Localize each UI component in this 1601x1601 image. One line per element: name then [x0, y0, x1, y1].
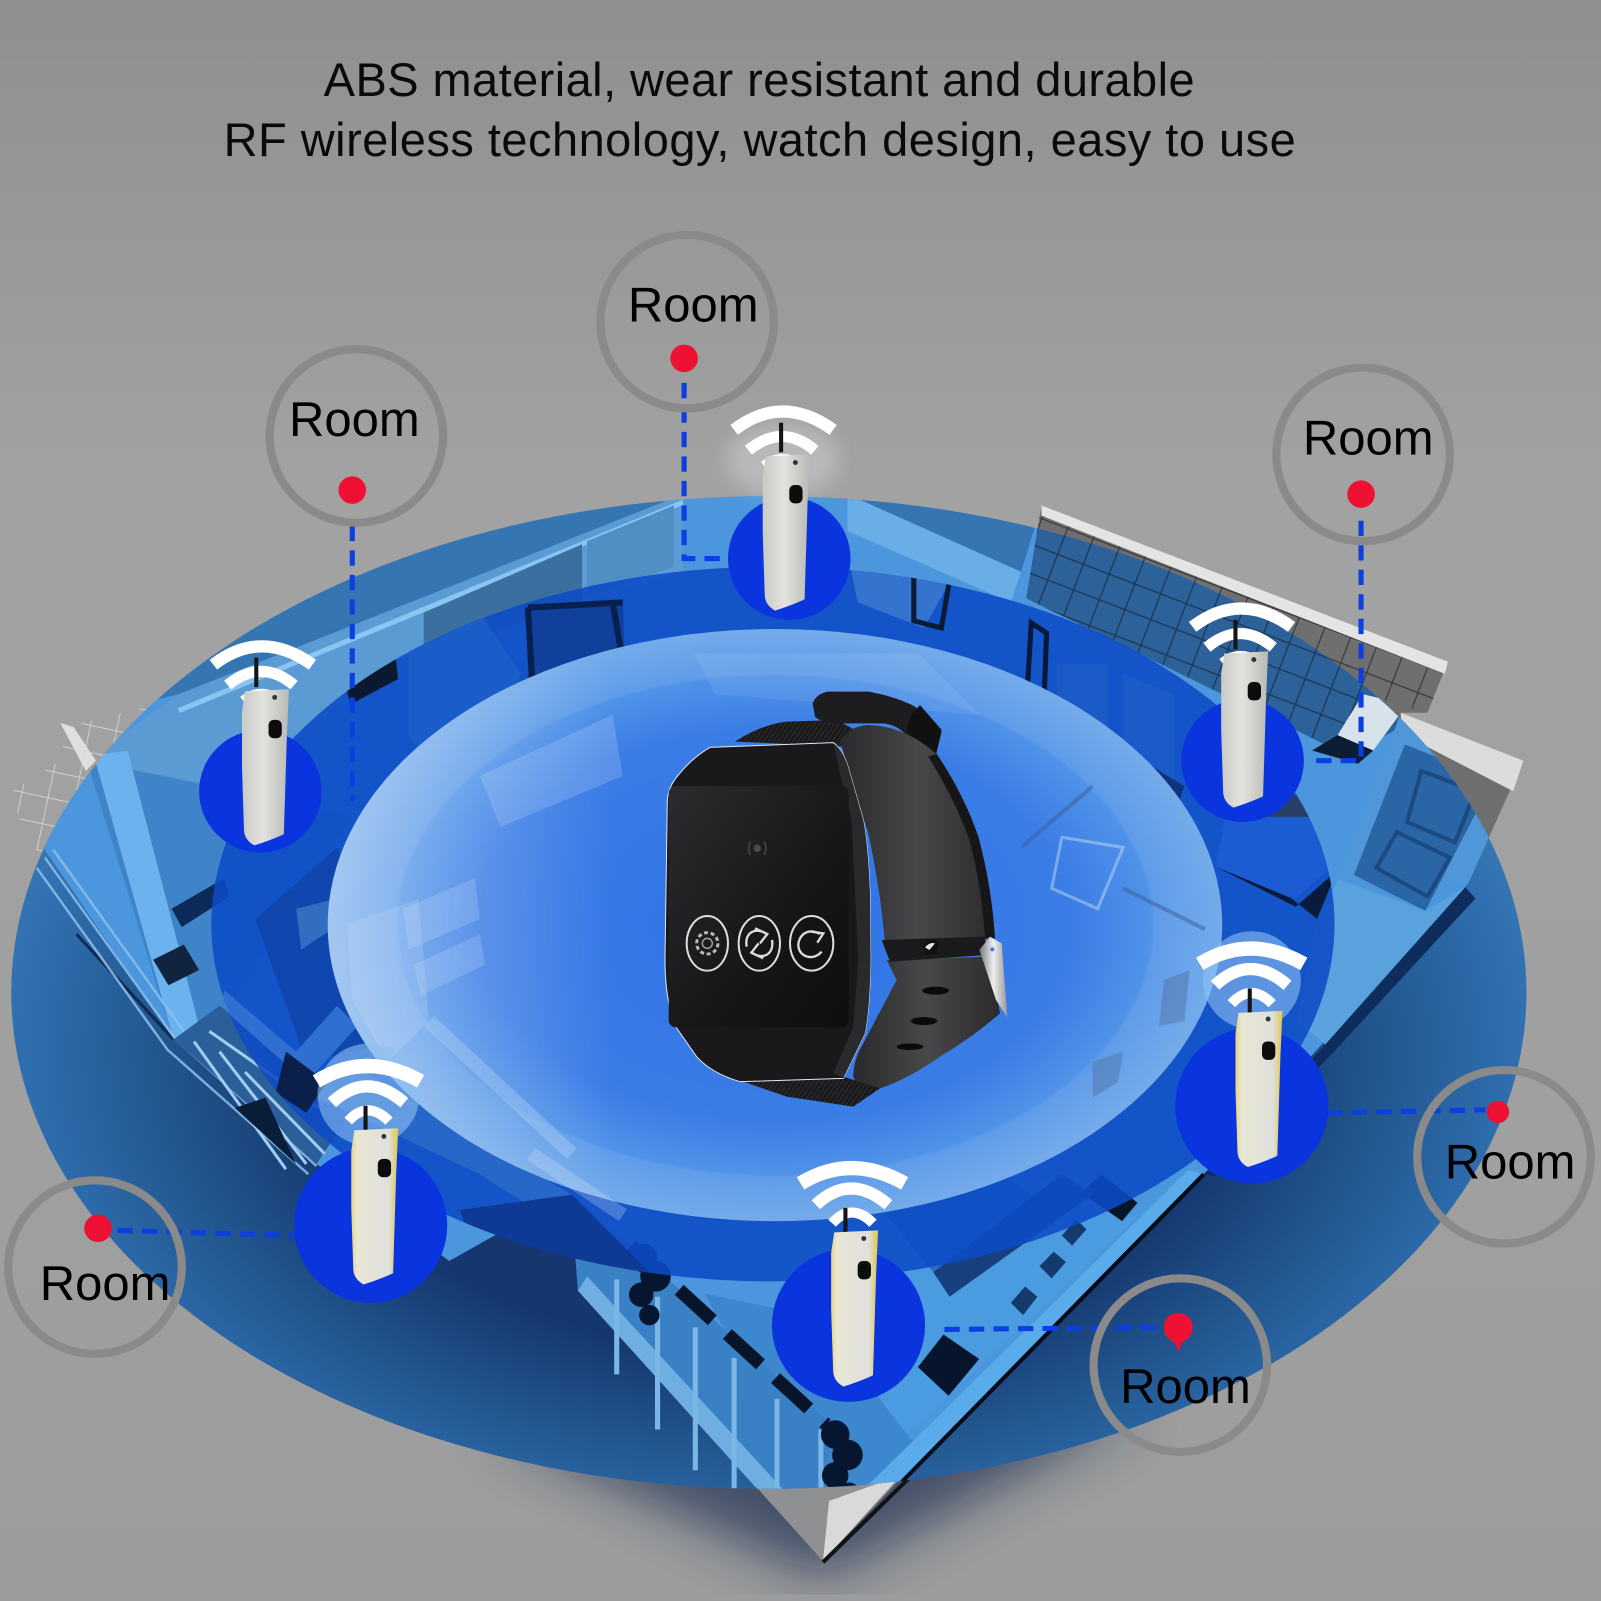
- sensor: right: [1181, 609, 1304, 822]
- smart watch: [665, 692, 1007, 1107]
- lower left railings: [174, 1006, 330, 1164]
- coverage ellipse: inner: [328, 629, 1222, 1221]
- room callout: upper right: Room: [1303, 411, 1434, 465]
- faint furniture: [403, 715, 623, 996]
- right floor: [1297, 879, 1465, 1045]
- lower strap: [853, 957, 1000, 1089]
- button: settings: [687, 916, 728, 971]
- upper strap: [840, 725, 995, 943]
- floor plan of the house: [36, 496, 1489, 1489]
- room callout: lower left: Room: [40, 1257, 171, 1311]
- sensor: top: [727, 411, 851, 620]
- watch case: [665, 743, 871, 1082]
- room callout: lower right: [1094, 1278, 1267, 1452]
- room callout: right: [1417, 1070, 1591, 1244]
- title: ABS material, wear resistant and durable: [324, 53, 1195, 106]
- room callout: top: [600, 235, 774, 408]
- top centre wall: [847, 494, 1021, 602]
- button: refresh: [790, 916, 833, 971]
- strap loop: [813, 692, 942, 755]
- strap keeper: [882, 937, 987, 962]
- sensor: lower right: [1175, 931, 1328, 1183]
- room callout: top: Room: [628, 279, 759, 333]
- room callout: upper left: [270, 349, 443, 523]
- ground shadow: [490, 1409, 1144, 1578]
- buckle: [979, 937, 1007, 1017]
- plan base: [44, 496, 1489, 1489]
- sensor: lower left: [294, 1044, 447, 1303]
- door: [1394, 717, 1489, 882]
- button: sync: [739, 916, 780, 971]
- coverage ellipse: outer: [11, 496, 1526, 1489]
- room callout: upper right: [1276, 368, 1450, 541]
- top-left wall: [87, 494, 683, 786]
- title: RF wireless technology, watch design, easy to use: [224, 113, 1296, 166]
- title: [224, 53, 1296, 166]
- coverage ellipse: middle: [211, 551, 1367, 1281]
- bottom right edge strip: [869, 1170, 1202, 1484]
- top right tiled wall: [1026, 528, 1406, 746]
- dashed link lines: [117, 383, 1486, 1329]
- signal icon: [749, 842, 766, 855]
- room callout: upper left: Room: [289, 393, 420, 447]
- glass window panel: [576, 1259, 828, 1489]
- sensor: left: [199, 646, 322, 853]
- room callout: right: Room: [1445, 1135, 1575, 1189]
- sensor: bottom: [772, 1168, 925, 1402]
- interior details: [409, 618, 492, 654]
- watch face: [669, 786, 849, 1027]
- building walls outside coverage: [7, 505, 1523, 1562]
- bottom ribbing: [743, 1077, 880, 1107]
- room callout: lower right: Room: [1120, 1360, 1251, 1414]
- room callout: lower left: [8, 1180, 182, 1354]
- bottom room floor: [776, 1147, 1204, 1454]
- left room: [90, 763, 228, 1030]
- upper strap ribbing: [735, 720, 873, 747]
